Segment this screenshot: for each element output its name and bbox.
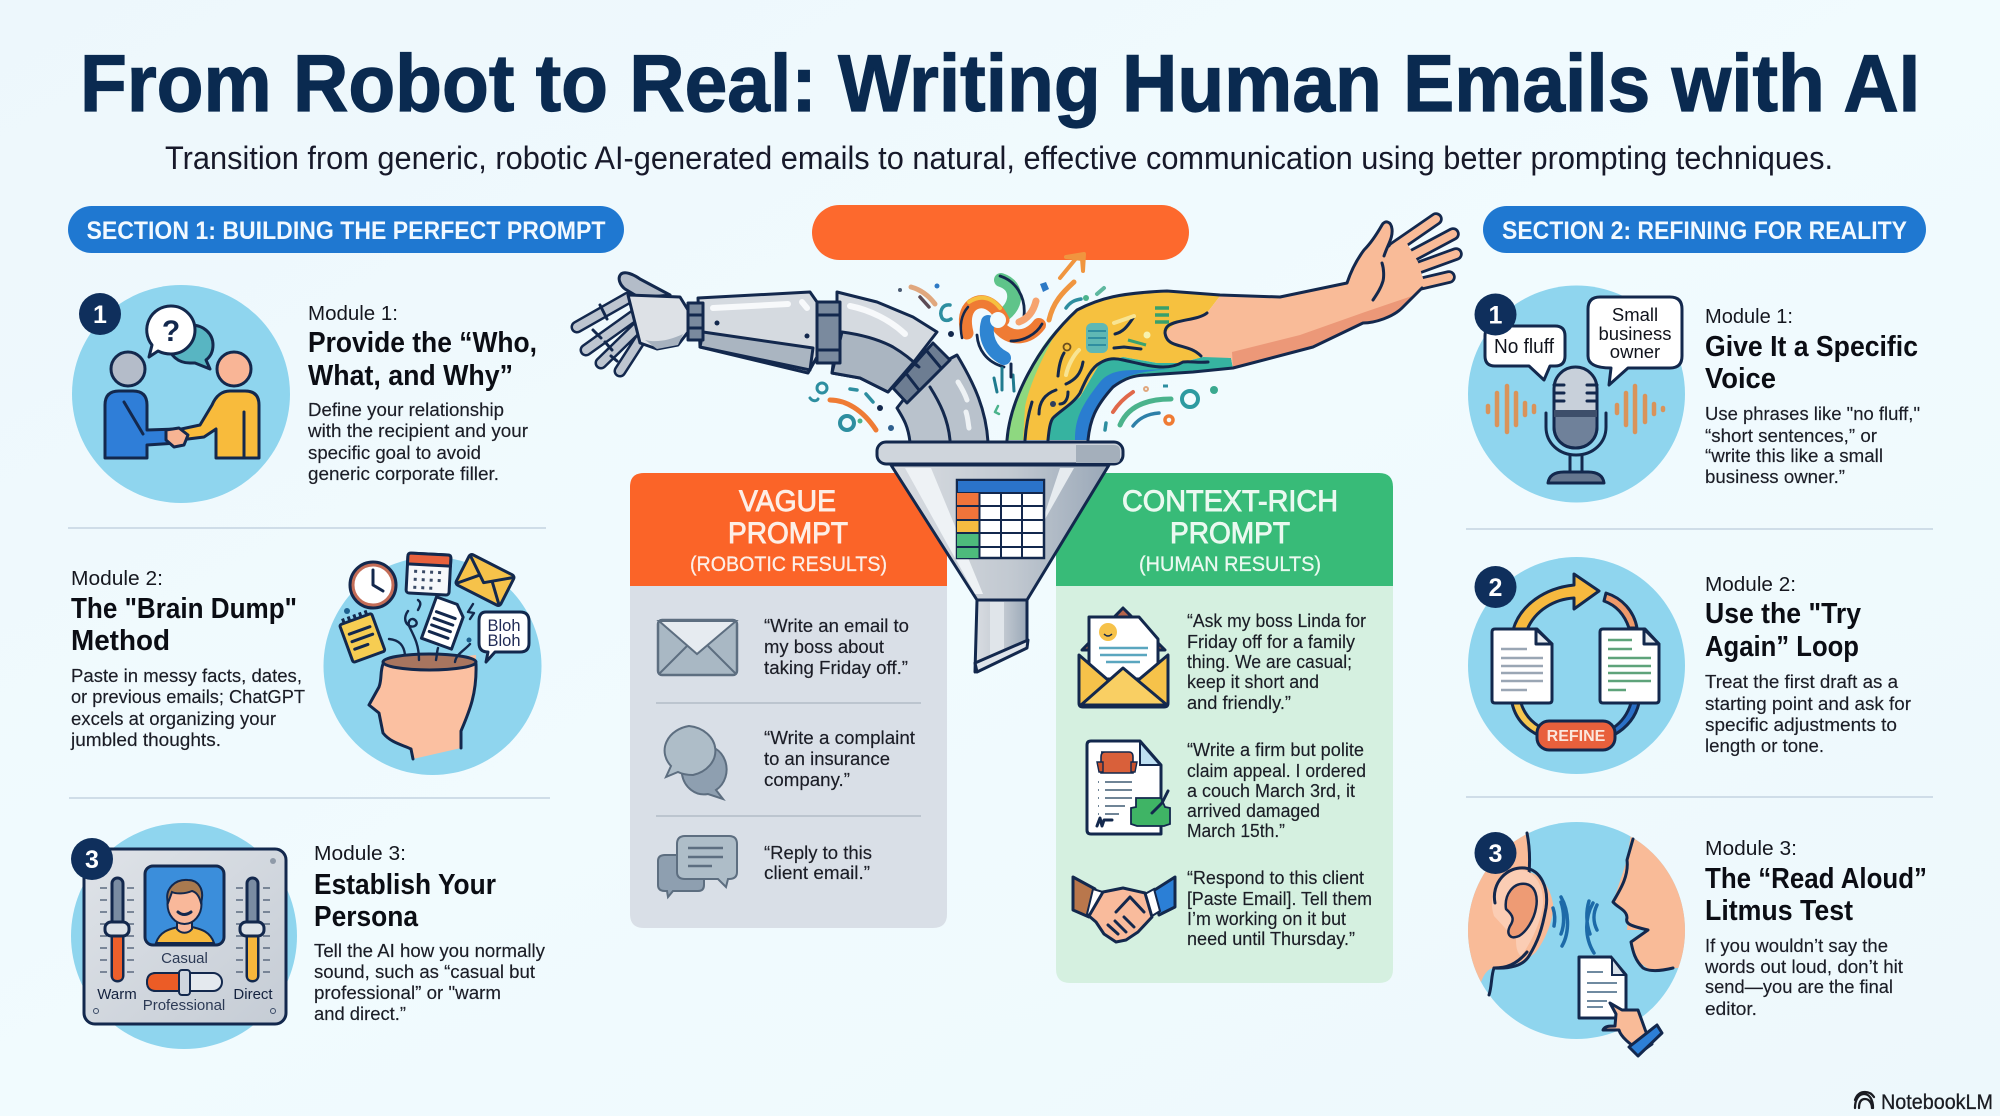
icon: persona control panel: Professional bbox=[143, 997, 225, 1014]
module 1 text: with the recipient and your bbox=[307, 420, 528, 441]
icon: persona control panel bbox=[71, 823, 297, 1049]
panel: section 1 module 1 bbox=[72, 285, 537, 503]
icon: brain dump head: Bloh bbox=[487, 632, 521, 650]
vague prompt 3 text bbox=[764, 842, 872, 883]
section 1 heading pill bbox=[68, 206, 624, 253]
right module 2 text: length or tone. bbox=[1705, 735, 1824, 756]
icon: brain dump head: Bloh bbox=[487, 617, 521, 635]
right module 1 text: Give It a Specific bbox=[1705, 331, 1918, 363]
context-rich header text: (HUMAN RESULTS) bbox=[1139, 553, 1321, 576]
context-rich header text bbox=[1122, 485, 1338, 576]
right module 1 text: “short sentences,” or bbox=[1705, 425, 1877, 446]
right module 2 text: Again” Loop bbox=[1705, 631, 1859, 663]
module 2 text: Paste in messy facts, dates, bbox=[71, 665, 302, 686]
context prompt 3 text: need until Thursday.” bbox=[1187, 928, 1355, 949]
module 1 text: specific goal to avoid bbox=[308, 442, 481, 463]
context prompt 3 text: “Respond to this client bbox=[1187, 867, 1364, 888]
context prompt 2 text: arrived damaged bbox=[1187, 800, 1320, 821]
right module 1 text: Voice bbox=[1705, 363, 1776, 395]
module 2 text: excels at organizing your bbox=[71, 708, 276, 729]
section 1 heading pill: SECTION 1: BUILDING THE PERFECT PROMPT bbox=[86, 217, 606, 245]
module 3 text bbox=[314, 843, 546, 1024]
vague header text bbox=[690, 485, 887, 576]
badge 1 right: 1 bbox=[1489, 302, 1503, 330]
badge 1: 1 bbox=[93, 301, 107, 329]
badge 3: 3 bbox=[85, 846, 99, 874]
context prompt 3 text: [Paste Email]. Tell them bbox=[1187, 888, 1372, 909]
icon: handshake bbox=[1073, 877, 1175, 942]
right module 2 text: starting point and ask for bbox=[1705, 693, 1911, 714]
colorful human arm bbox=[1007, 219, 1456, 440]
context prompt 1 text: keep it short and bbox=[1187, 671, 1319, 692]
icon: persona control panel: Casual bbox=[161, 950, 208, 967]
module 3 text: sound, such as “casual but bbox=[314, 961, 535, 982]
icon: two people shaking hands bbox=[72, 285, 290, 503]
icon: persona control panel: Warm bbox=[97, 986, 137, 1003]
right module 3 text: If you wouldn’t say the bbox=[1705, 935, 1888, 956]
panel: section 2 module 3 bbox=[1453, 820, 1927, 1056]
icon: gray reply bubbles bbox=[658, 836, 737, 897]
vague prompt 1 text bbox=[764, 615, 909, 678]
module 3 text: and direct.” bbox=[314, 1003, 406, 1024]
context-rich header text: PROMPT bbox=[1170, 517, 1290, 550]
module 1 text: Provide the “Who, bbox=[308, 327, 537, 359]
icon: try again loop bbox=[1468, 557, 1685, 774]
context prompt 2 text: a couch March 3rd, it bbox=[1187, 780, 1355, 801]
panel: section 2 module 1 bbox=[1468, 286, 1920, 502]
context prompt 2 text: “Write a firm but polite bbox=[1187, 739, 1364, 760]
module 2 text: Method bbox=[71, 625, 170, 657]
context prompt 1 text: and friendly.” bbox=[1187, 692, 1291, 713]
module 2 text: or previous emails; ChatGPT bbox=[71, 686, 305, 707]
icon: microphone with speech bubbles: Small bbox=[1612, 304, 1658, 325]
icon: two people shaking hands: ? bbox=[162, 315, 180, 348]
badge 1 bbox=[79, 293, 121, 335]
vague prompt 3 text: client email.” bbox=[764, 862, 870, 883]
vague header text: PROMPT bbox=[728, 517, 848, 550]
subtitle: Transition from generic, robotic AI-generated emails to natural, effective communication using better prompting techniques. bbox=[165, 140, 1833, 176]
right module 3 text bbox=[1704, 838, 1927, 1019]
right module 2 text: specific adjustments to bbox=[1705, 714, 1897, 735]
context prompt 3 text: I’m working on it but bbox=[1187, 908, 1346, 929]
module 1 text bbox=[307, 303, 537, 484]
right module 1 text bbox=[1705, 306, 1920, 487]
right module 3 text: Litmus Test bbox=[1705, 895, 1853, 927]
right module 1 text: Use phrases like "no fluff," bbox=[1705, 403, 1920, 424]
icon: persona control panel: Direct bbox=[233, 986, 273, 1003]
panel: vague prompt bbox=[630, 473, 947, 928]
right module 3 text: send—you are the final bbox=[1705, 976, 1893, 997]
badge 2 right bbox=[1474, 566, 1516, 608]
hand fingers bbox=[1394, 219, 1456, 285]
NotebookLM watermark: NotebookLM bbox=[1881, 1091, 1993, 1114]
panel: section 2 module 2 bbox=[1468, 557, 1911, 774]
module 2 text: The "Brain Dump" bbox=[71, 593, 297, 625]
module 2 text bbox=[70, 568, 305, 750]
icon: microphone with speech bubbles: owner bbox=[1610, 341, 1660, 362]
panel: section 1 module 2 bbox=[70, 553, 542, 775]
vague prompt 1 text: “Write an email to bbox=[764, 615, 909, 636]
right module 2 text bbox=[1705, 574, 1911, 756]
right module 2 text: Use the "Try bbox=[1705, 598, 1861, 630]
panel: context-rich prompt bbox=[1056, 473, 1393, 983]
context-rich header text: CONTEXT-RICH bbox=[1122, 485, 1338, 518]
badge 1 right bbox=[1474, 294, 1516, 336]
context prompt 1 text: Friday off for a family bbox=[1187, 631, 1356, 652]
module 1 text: Define your relationship bbox=[308, 399, 504, 420]
vague header text: (ROBOTIC RESULTS) bbox=[690, 553, 887, 576]
arm detail marks bbox=[1039, 308, 1169, 414]
context prompt 2 text: claim appeal. I ordered bbox=[1187, 760, 1366, 781]
icon: microphone with speech bubbles: No fluff bbox=[1494, 336, 1554, 358]
module 2 text: Module 2: bbox=[71, 568, 163, 590]
right module 1 text: Module 1: bbox=[1705, 306, 1793, 328]
icon: microphone with speech bubbles bbox=[1468, 286, 1685, 502]
icon: yellow envelope with letter bbox=[1079, 608, 1168, 707]
title: From Robot to Real: Writing Human Emails with AI bbox=[80, 39, 1920, 129]
vague prompt 2 text: “Write a complaint bbox=[764, 727, 915, 748]
context prompt 2 text bbox=[1187, 739, 1366, 841]
blank orange center pill bbox=[812, 205, 1189, 260]
right module 3 text: The “Read Aloud” bbox=[1705, 863, 1927, 895]
context prompt 1 text: “Ask my boss Linda for bbox=[1187, 610, 1366, 631]
right module 1 text: “write this like a small bbox=[1705, 445, 1883, 466]
vague prompt 2 text: to an insurance bbox=[764, 748, 890, 769]
module 2 text: jumbled thoughts. bbox=[70, 729, 221, 750]
right module 2 text: Module 2: bbox=[1705, 574, 1796, 596]
panel: section 1 module 3 bbox=[71, 823, 546, 1049]
context prompt 1 text: thing. We are casual; bbox=[1187, 651, 1352, 672]
context prompt 1 text bbox=[1187, 610, 1366, 713]
badge 3 right bbox=[1474, 832, 1516, 874]
section 2 heading pill bbox=[1483, 206, 1926, 253]
vague header text: VAGUE bbox=[739, 485, 836, 518]
module 3 text: Persona bbox=[314, 901, 419, 933]
module 3 text: Establish Your bbox=[314, 869, 496, 901]
badge 3 right: 3 bbox=[1489, 840, 1502, 868]
right module 3 text: editor. bbox=[1705, 998, 1757, 1019]
section 2 heading pill: SECTION 2: REFINING FOR REALITY bbox=[1502, 217, 1907, 245]
module 1 text: Module 1: bbox=[308, 303, 398, 325]
vague prompt 3 text: “Reply to this bbox=[764, 842, 872, 863]
vague prompt 1 text: my boss about bbox=[764, 636, 884, 657]
module 3 text: professional” or "warm bbox=[314, 982, 501, 1003]
module 1 text: generic corporate filler. bbox=[308, 463, 499, 484]
icon: try again loop: REFINE bbox=[1547, 728, 1606, 745]
icon: gray chat bubbles bbox=[665, 726, 727, 799]
module 3 text: Module 3: bbox=[314, 843, 406, 865]
right module 2 text: Treat the first draft as a bbox=[1705, 671, 1899, 692]
right module 3 text: Module 3: bbox=[1705, 838, 1797, 860]
right module 1 text: business owner.” bbox=[1705, 466, 1845, 487]
badge 2 right: 2 bbox=[1489, 574, 1502, 602]
context prompt 3 text bbox=[1187, 867, 1372, 949]
module 3 text: Tell the AI how you normally bbox=[314, 940, 546, 961]
right module 3 text: words out loud, don’t hit bbox=[1704, 956, 1903, 977]
icon: gray envelope bbox=[658, 620, 737, 675]
badge 3 bbox=[71, 838, 113, 880]
icon: ear listening to speaking mouth bbox=[1468, 822, 1685, 1058]
swirl and confetti bbox=[810, 254, 1218, 431]
icon: claim document with couch bbox=[1087, 741, 1170, 834]
icon: microphone with speech bubbles: business bbox=[1598, 323, 1672, 344]
module 1 text: What, and Why” bbox=[308, 360, 513, 392]
funnel bbox=[877, 442, 1123, 672]
vague prompt 2 text: company.” bbox=[764, 769, 850, 790]
robot arm bbox=[577, 273, 988, 442]
icon: spreadsheet in funnel bbox=[957, 480, 1044, 558]
icon: brain dump head bbox=[324, 553, 542, 775]
context prompt 2 text: March 15th.” bbox=[1187, 820, 1285, 841]
vague prompt 2 text bbox=[764, 727, 915, 790]
vague prompt 1 text: taking Friday off.” bbox=[764, 657, 908, 678]
